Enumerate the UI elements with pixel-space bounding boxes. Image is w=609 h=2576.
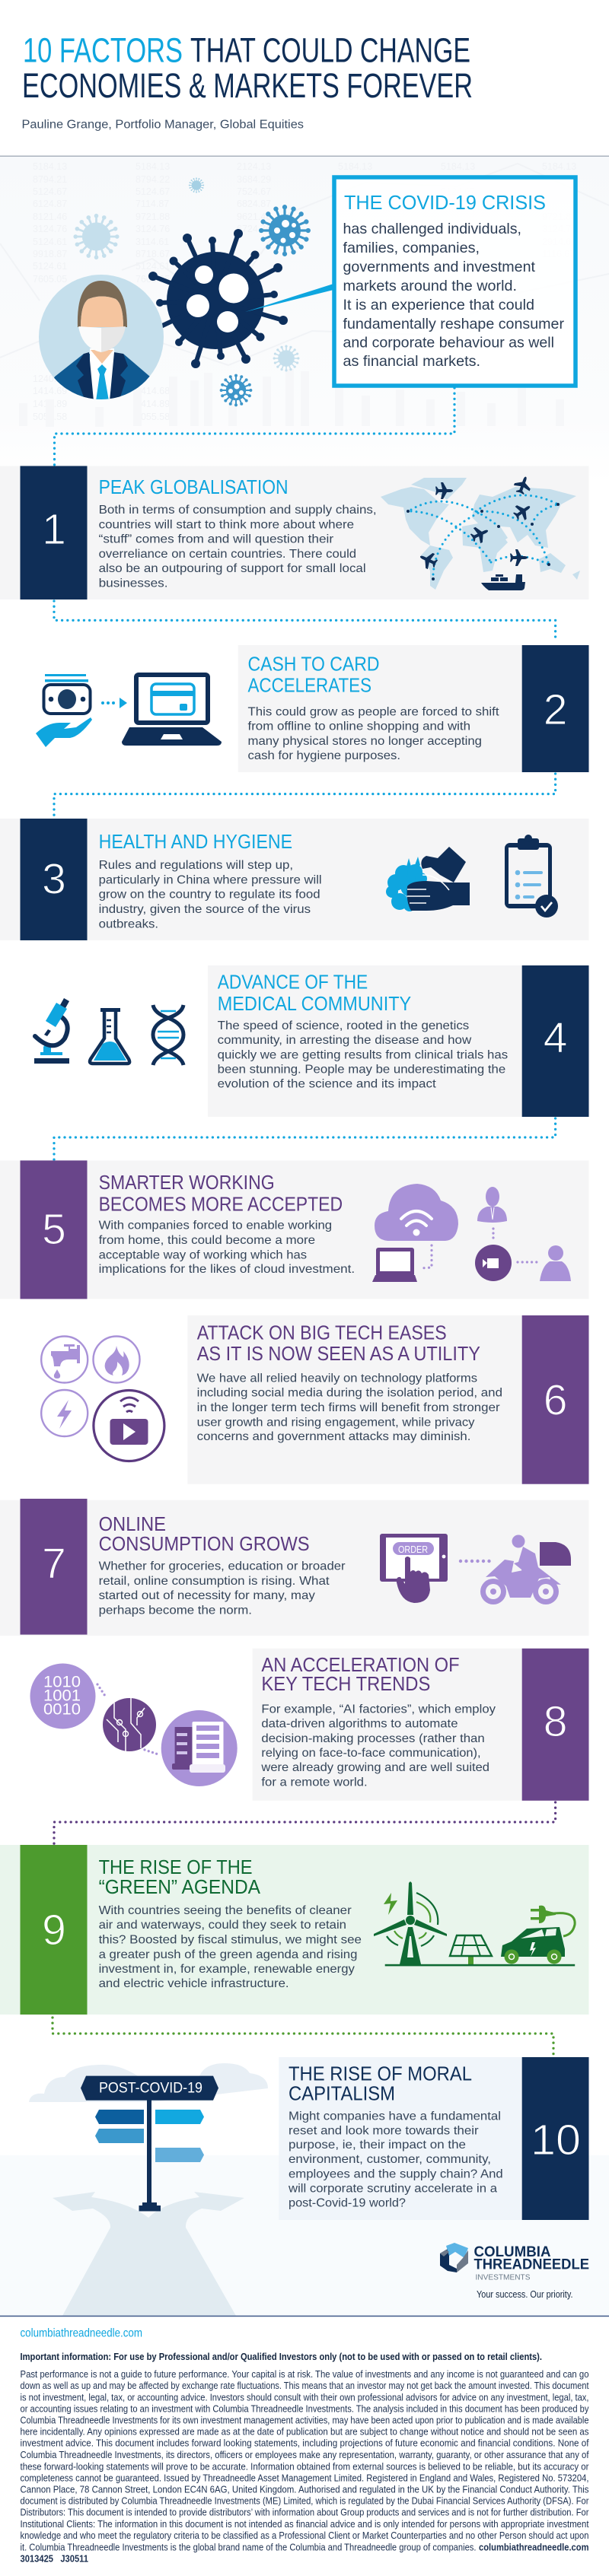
heading [197, 1321, 480, 1365]
icon: server circle [145, 1710, 238, 1786]
body text [197, 1372, 502, 1443]
body text: With companies forced to enable working [99, 1220, 332, 1232]
body text: quickly we are getting results from clinical trials has [218, 1048, 508, 1061]
body text: for a remote world. [261, 1776, 368, 1789]
important information disclaimer: columbiathreadneedle.com [479, 2542, 589, 2552]
important information disclaimer: 3013425 J30511 [20, 2553, 88, 2564]
icon: man wearing a mask [38, 275, 164, 403]
body text: in the longer term tech firms will benefit from stronger [197, 1401, 500, 1414]
title: ECONOMIES & MARKETS FOREVER [22, 66, 473, 105]
body text [248, 705, 499, 762]
icon: video call [475, 1245, 537, 1281]
connector: factor 8 to factor 9 [54, 1802, 556, 1844]
heading [289, 2062, 472, 2105]
heading: CASH TO CARD [248, 652, 379, 675]
connector: factor 2 to factor 3 [54, 774, 556, 817]
callout: the covid-19 crisis: governments and investment [343, 259, 536, 275]
heading: ADVANCE OF THE [218, 971, 368, 994]
heading: MEDICAL COMMUNITY [218, 992, 411, 1015]
panel: factor 7 online consumption grows [0, 1499, 589, 1636]
callout: the covid-19 crisis: It is an experience that could [343, 297, 534, 313]
icon: small viruses [73, 177, 311, 406]
body text: were already growing and are well suited [260, 1761, 489, 1774]
text: 1414.89 [33, 399, 67, 409]
text: 9721.88 [136, 211, 170, 222]
body text: relying on face-to-face communication), [261, 1747, 481, 1760]
heading: ATTACK ON BIG TECH EASES [197, 1321, 447, 1344]
text: 5124.67 [33, 186, 67, 197]
text: 8718.67 [136, 249, 170, 259]
text: 3114.61 [136, 237, 169, 247]
body text: outbreaks. [99, 918, 158, 930]
heading: HEALTH AND HYGIENE [99, 830, 292, 853]
body text [99, 1220, 355, 1276]
text: 5124.67 [136, 186, 170, 197]
panel: factor 4 advance of the medical community [34, 965, 589, 1117]
text: 1414.69 [33, 386, 67, 396]
icon: laptop with credit card [122, 673, 222, 746]
panel: factor 9 the green agenda: 9 [42, 1906, 66, 1954]
icon: lightning bolt [41, 1390, 88, 1436]
text: 6824.87 [237, 199, 271, 209]
body text: employees and the supply chain? And [289, 2168, 503, 2181]
icon: signpost: POST-COVID-19 [99, 2081, 202, 2097]
text: 9721.88 [542, 211, 576, 222]
heading: BECOMES MORE ACCEPTED [99, 1192, 343, 1215]
connector: factor 9 to factor 10 [53, 2018, 553, 2055]
body text: Whether for groceries, education or broader [99, 1560, 346, 1573]
logo: columbia threadneedle investments: INVESTMENTS [475, 2273, 530, 2282]
heading: ONLINE [99, 1512, 166, 1535]
body text: been stunning. People may be underestimating the [218, 1063, 505, 1076]
text: 1240.88 [33, 374, 67, 384]
panel: factor 6 attack on big tech: 6 [544, 1376, 567, 1425]
heading [99, 1856, 261, 1898]
heading: AN ACCELERATION OF [261, 1653, 460, 1676]
text: 5124.61 [33, 261, 67, 272]
text: 2914.61 [542, 237, 576, 247]
body text [99, 1904, 362, 1990]
panel: factor 6 attack on big tech [41, 1315, 588, 1484]
icon: delivery motorbike [480, 1535, 571, 1604]
icon: wind turbine [374, 1881, 447, 1964]
text: 5184.13 [136, 161, 170, 172]
body text: acceptable way of working which has [99, 1248, 307, 1261]
heading: PEAK GLOBALISATION [99, 475, 289, 498]
body text: grow on the country to regulate its food [99, 889, 320, 902]
icon: tablet order button: ORDER [398, 1544, 428, 1555]
heading: KEY TECH TRENDS [261, 1672, 430, 1695]
text: 1414.68 [136, 386, 170, 396]
callout: the covid-19 crisis: and corporate behaviour as well [343, 335, 554, 351]
icon: delivery dots [459, 1560, 491, 1563]
heading: CONSUMPTION GROWS [99, 1532, 310, 1555]
icon: dna helix [153, 1005, 183, 1065]
heading: SMARTER WORKING [99, 1171, 275, 1194]
panel: factor 8 acceleration of key tech trends: 8 [544, 1697, 567, 1746]
icon: binary data circle [30, 1663, 107, 1728]
icon: cash in hand [36, 674, 92, 747]
icon: binary data circle: 0010 [43, 1701, 81, 1719]
icon: binary data circle: 1010 [43, 1674, 81, 1690]
icon: solar panel [450, 1935, 492, 1965]
text: 5184.13 [338, 161, 372, 172]
body text: particularly in China where pressure will [99, 873, 322, 886]
text: 3124.76 [136, 224, 170, 234]
heading [248, 652, 379, 696]
icon: flask [90, 1008, 129, 1064]
body text: concerns and government attacks may diminish. [197, 1430, 470, 1443]
body text [218, 1019, 508, 1091]
title: 10 FACTORS [23, 30, 183, 69]
logo: columbia threadneedle investments: THREADNEEDLE [473, 2257, 589, 2273]
text: 3124.76 [542, 224, 576, 234]
body text: and electric vehicle infrastructure. [99, 1977, 289, 1990]
body text [288, 2110, 503, 2210]
body text [99, 504, 377, 590]
body text: from home, this could become a more [99, 1234, 315, 1247]
body text: including social media during the isolation period, and [197, 1387, 502, 1400]
body text: post-Covid-19 world? [289, 2197, 406, 2210]
panel: factor 9 the green agenda [0, 1845, 589, 2015]
callout: the covid-19 crisis [245, 177, 576, 386]
body text: evolution of the science and its impact [218, 1078, 436, 1091]
panel: factor 2 cash to card: 2 [544, 685, 567, 734]
text: 9621.46 [237, 211, 271, 222]
title [22, 30, 473, 105]
body text: purpose, ie, their impact on the [289, 2139, 466, 2151]
heading: CAPITALISM [289, 2082, 395, 2105]
callout: the covid-19 crisis: families, companies, [343, 240, 480, 256]
body text: For example, “AI factories”, which employ [261, 1703, 496, 1716]
body text: investment in, for example, renewable energy [99, 1963, 355, 1976]
panel: factor 5 smarter working [0, 1160, 589, 1299]
body text [99, 1560, 346, 1617]
text: 9918.87 [33, 249, 67, 259]
text: 3684.29 [237, 174, 271, 185]
panel: factor 10 the rise of moral capitalism: 10 [531, 2116, 581, 2164]
heading: ACCELERATES [248, 673, 371, 696]
panel: factor 3 health and hygiene [0, 819, 589, 940]
heading: “GREEN” AGENDA [99, 1875, 261, 1898]
panel: factor 4 advance of the medical community: 4 [544, 1014, 567, 1063]
icon: clipboard with check mark [505, 835, 558, 918]
heading [99, 1171, 343, 1215]
illustration: crossroads background [0, 2063, 609, 2316]
body text [99, 859, 322, 930]
icon: cloud with wifi [375, 1184, 458, 1241]
body text: countries will start to think more about where [99, 518, 354, 531]
icon: world map with flight routes [381, 474, 580, 590]
logo: columbia threadneedle investments: COLUMBIA [473, 2244, 551, 2260]
icon: microscope [34, 998, 69, 1064]
body text: will corporate scrutiny accelerate in a [288, 2183, 497, 2196]
icon: streaming device [94, 1391, 164, 1461]
panel: factor 3 health and hygiene: 3 [42, 855, 66, 904]
icon: flame [93, 1336, 140, 1383]
icon: laptop [372, 1245, 432, 1282]
heading [99, 1512, 310, 1555]
author line: Pauline Grange, Portfolio Manager, Global Equities [21, 119, 304, 132]
text: 2055.58 [136, 412, 170, 422]
body text: decision-making processes (rather than [261, 1732, 485, 1745]
body text: cash for hygiene purposes. [248, 749, 400, 762]
heading [218, 971, 411, 1015]
body text: data-driven algorithms to automate [261, 1718, 458, 1731]
callout: the covid-19 crisis: markets around the world. [343, 278, 517, 294]
body text: With countries seeing the benefits of cleaner [99, 1904, 352, 1917]
body text: This could grow as people are forced to shift [248, 705, 499, 718]
panel: factor 2 cash to card [36, 645, 589, 772]
text: 3124.76 [33, 224, 67, 234]
icon: businessman [477, 1187, 507, 1242]
text: 5184.13 [542, 161, 576, 172]
arrow [101, 698, 127, 708]
panel: factor 1 peak globalisation: 1 [42, 505, 66, 554]
text: 8794.22 [136, 174, 170, 185]
panel: factor 5 smarter working: 5 [42, 1205, 66, 1254]
heading: AS IT IS NOW SEEN AS A UTILITY [197, 1342, 480, 1365]
icon: signpost [81, 2076, 218, 2211]
text: 6724.76 [237, 224, 271, 234]
icon: woman [540, 1245, 571, 1281]
callout: the covid-19 crisis: as financial markets. [343, 353, 480, 370]
text: 1414.89 [136, 399, 170, 409]
body text [260, 1703, 496, 1789]
heading: THE RISE OF THE [99, 1856, 253, 1878]
text: 5124.61 [33, 237, 67, 247]
body text: businesses. [99, 577, 168, 590]
logo: columbia threadneedle investments: Your success. Our priority. [477, 2288, 572, 2300]
body text: The speed of science, rooted in the genetics [218, 1019, 469, 1032]
body text: implications for the likes of cloud investment. [99, 1263, 355, 1276]
icon: large virus [148, 229, 288, 368]
connector: callout to factor 1 [55, 388, 454, 466]
body text: this? Boosted by fiscal stimulus, we might see [99, 1934, 362, 1947]
logo: columbia threadneedle investments [440, 2243, 589, 2300]
panel: factor 8 acceleration of key tech trends [30, 1649, 589, 1801]
body text: many physical stores no longer accepting [248, 735, 482, 748]
text: 7524.67 [237, 186, 271, 197]
body text: air and waterways, could they seek to retain [99, 1919, 346, 1932]
body text: industry, given the source of the virus [99, 903, 311, 916]
text: 5055.58 [33, 412, 67, 422]
body text: perhaps become the norm. [99, 1604, 252, 1617]
heading [261, 1653, 460, 1695]
icon: washing hands [386, 847, 470, 911]
icon: binary data circle: 1001 [43, 1687, 81, 1704]
text: 7605.05 [33, 274, 67, 285]
panel: factor 1 peak globalisation [0, 466, 589, 599]
icon: electric car with plug [501, 1906, 575, 1964]
title: THAT COULD CHANGE [190, 30, 470, 69]
important information disclaimer [20, 2351, 589, 2564]
body text: “stuff” comes from and will question their [99, 533, 334, 546]
connector: factor 4 to factor 5 [54, 1118, 556, 1160]
body text: Both in terms of consumption and supply chains, [99, 504, 377, 517]
panel: factor 7 online consumption grows: 7 [42, 1540, 66, 1589]
important information disclaimer: it. Columbia Threadneedle Investments is the global brand name of the Columbia and Threadneedle group of companies. [20, 2542, 477, 2552]
body text: overreliance on certain countries. There could [99, 548, 356, 561]
body text: Might companies have a fundamental [289, 2110, 501, 2123]
body text: Rules and regulations will step up, [99, 859, 293, 872]
text: 7114.87 [136, 199, 169, 209]
text: 8794.21 [33, 174, 67, 185]
body text: community, in arresting the disease and how [218, 1034, 472, 1047]
body text: reset and look more towards their [289, 2125, 479, 2138]
callout: the covid-19 crisis: has challenged individuals, [343, 221, 521, 237]
body text: user growth and rising engagement, while privacy [197, 1416, 475, 1429]
body text: started out of necessity for many, may [99, 1589, 315, 1602]
body text: from offline to online shopping and with [248, 720, 470, 733]
text: 6124.87 [33, 199, 67, 209]
body text: retail, online consumption is rising. What [99, 1575, 330, 1588]
callout: the covid-19 crisis: fundamentally reshape consumer [343, 316, 564, 332]
website link: columbiathreadneedle.com [20, 2327, 142, 2340]
text: 8121.46 [33, 211, 67, 222]
icon: tablet order button [380, 1534, 448, 1603]
text: 5124.67 [441, 186, 475, 197]
text: 7605.05 [136, 274, 170, 285]
body text: environment, customer, community, [289, 2153, 491, 2166]
body text: also be an outpouring of support for small local [99, 562, 366, 575]
body text: a greater push of the green agenda and rising [99, 1948, 357, 1961]
text: 5184.13 [33, 161, 67, 172]
heading: THE RISE OF MORAL [289, 2062, 472, 2085]
text: 5124.61 [136, 261, 170, 272]
body text: We have all relied heavily on technology platforms [197, 1372, 477, 1385]
connector: factor 1 to factor 2 [54, 601, 556, 642]
callout: the covid-19 crisis: THE COVID-19 CRISIS [344, 191, 546, 214]
text: 5184.13 [441, 161, 475, 172]
icon: circuit circle [103, 1698, 156, 1751]
text: 1116.67 [542, 249, 575, 259]
panel: factor 10 the rise of moral capitalism [279, 2057, 589, 2220]
text: 2124.13 [237, 161, 271, 172]
icon: water tap [41, 1336, 88, 1383]
